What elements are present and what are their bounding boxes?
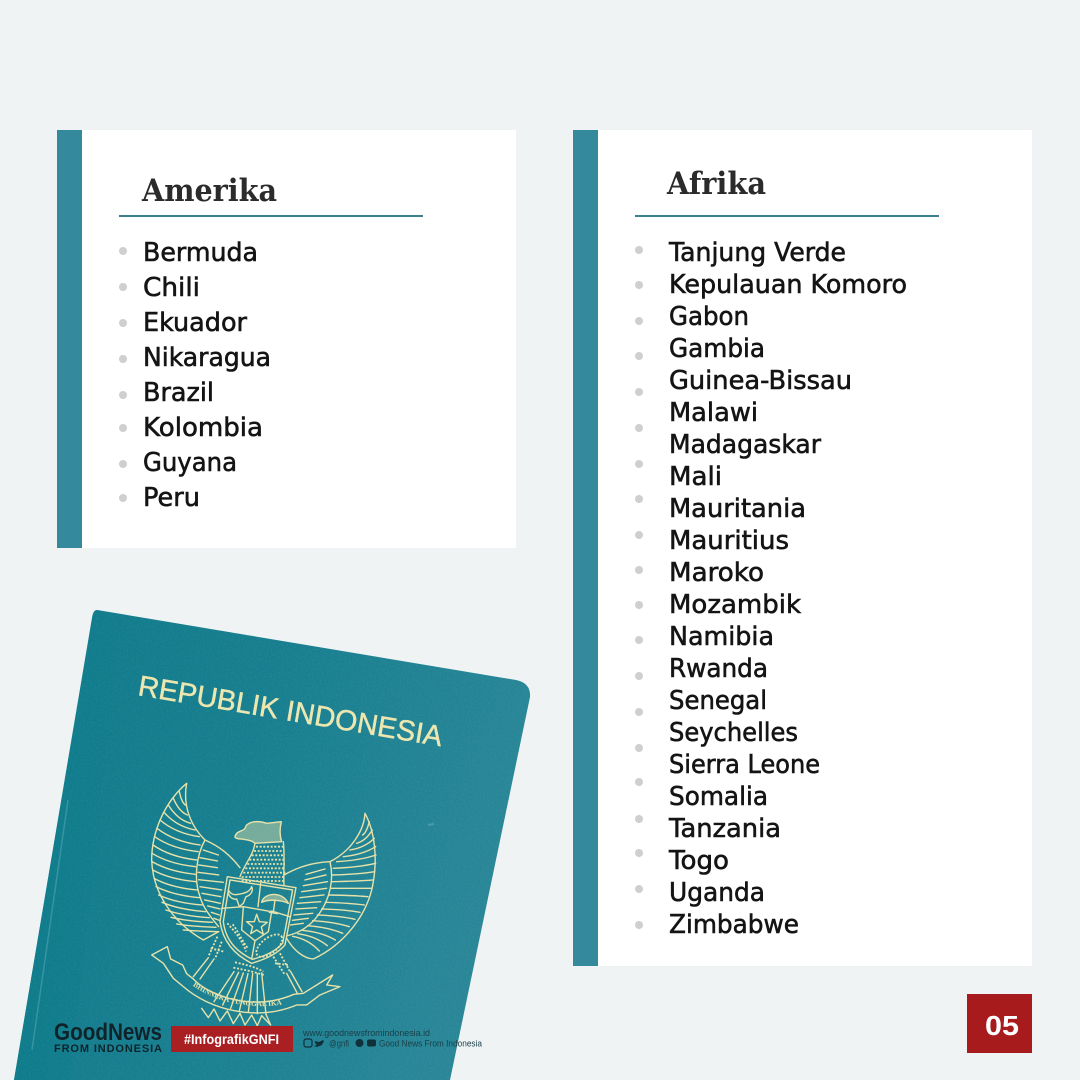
list: Amerika countries: Brazil (143, 378, 214, 408)
list: Afrika countries: Mauritania (669, 494, 806, 524)
list: Afrika countries: Rwanda (669, 654, 768, 684)
logo: GoodNews From Indonesia: FROM INDONESIA (54, 1043, 162, 1055)
panel: Afrika (573, 130, 1032, 966)
list: Amerika countries: Kolombia (143, 413, 263, 443)
bull, tree, rice and chain charges (228, 887, 252, 907)
list: Afrika countries: Togo (668, 846, 729, 876)
website and social handles: Good News From Indonesia (379, 1038, 482, 1048)
hashtag badge (171, 1026, 293, 1052)
icon: Garuda emblem (150, 782, 377, 1026)
list: Afrika countries: Somalia (669, 782, 768, 812)
left wing (152, 783, 219, 940)
panel: Amerika (57, 130, 516, 548)
list: Afrika countries: Malawi (669, 398, 758, 428)
list: Amerika countries: Ekuador (143, 308, 247, 338)
list: Afrika countries: Gabon (669, 302, 749, 332)
list: Afrika countries: Mauritius (669, 526, 789, 556)
list: Amerika countries: Chili (143, 273, 200, 303)
list: Afrika countries: Zimbabwe (669, 910, 799, 940)
footer brand strip (54, 1019, 482, 1055)
motto ribbon (152, 947, 340, 1013)
website and social handles (302, 1028, 482, 1048)
hashtag badge: #InfografikGNFI (184, 1032, 279, 1047)
list: Afrika countries: Uganda (669, 878, 765, 908)
icon: Garuda emblem: BHINNEKA TUNGGAL IKA (192, 982, 282, 1006)
list: Afrika countries: Guinea-Bissau (669, 366, 852, 396)
list: Afrika countries: Senegal (669, 686, 767, 716)
list: Afrika countries: Madagaskar (669, 430, 821, 460)
logo: GoodNews From Indonesia: GoodNews (54, 1019, 162, 1046)
list: Afrika countries: Mozambik (669, 590, 801, 620)
website and social handles: @gnfi (329, 1038, 349, 1048)
list: Afrika countries: Namibia (669, 622, 774, 652)
list: Afrika countries: Mali (669, 462, 722, 492)
list: Amerika countries (119, 238, 271, 513)
list: Afrika countries: Tanzania (668, 814, 781, 844)
list: Amerika countries: Peru (143, 483, 200, 513)
list: Afrika countries: Tanjung Verde (668, 238, 846, 268)
passport title: REPUBLIK INDONESIA (136, 670, 445, 753)
list: Amerika countries: Bermuda (143, 238, 258, 268)
tail (233, 962, 264, 975)
head and neck (235, 822, 282, 843)
list: Afrika countries: Sierra Leone (669, 750, 820, 780)
passport illustration (14, 610, 530, 1080)
shield (220, 877, 296, 963)
page number badge: 05 (985, 1010, 1019, 1041)
list: Afrika countries: Seychelles (669, 718, 798, 748)
logo: GoodNews From Indonesia (54, 1019, 162, 1055)
list: Afrika countries: Kepulauan Komoro (669, 270, 907, 300)
heading: Afrika: Afrika (666, 166, 766, 202)
list: Amerika countries: Nikaragua (143, 343, 271, 373)
list: Amerika countries: Guyana (143, 448, 237, 478)
page number badge (967, 994, 1032, 1053)
heading: Amerika: Amerika (141, 173, 277, 209)
list: Afrika countries: Maroko (669, 558, 764, 588)
list: Afrika countries (635, 238, 907, 940)
legs and claws (208, 937, 290, 975)
list: Afrika countries: Gambia (669, 334, 765, 364)
right wing (287, 813, 375, 959)
website and social handles: www.goodnewsfromindonesia.id (302, 1028, 430, 1038)
